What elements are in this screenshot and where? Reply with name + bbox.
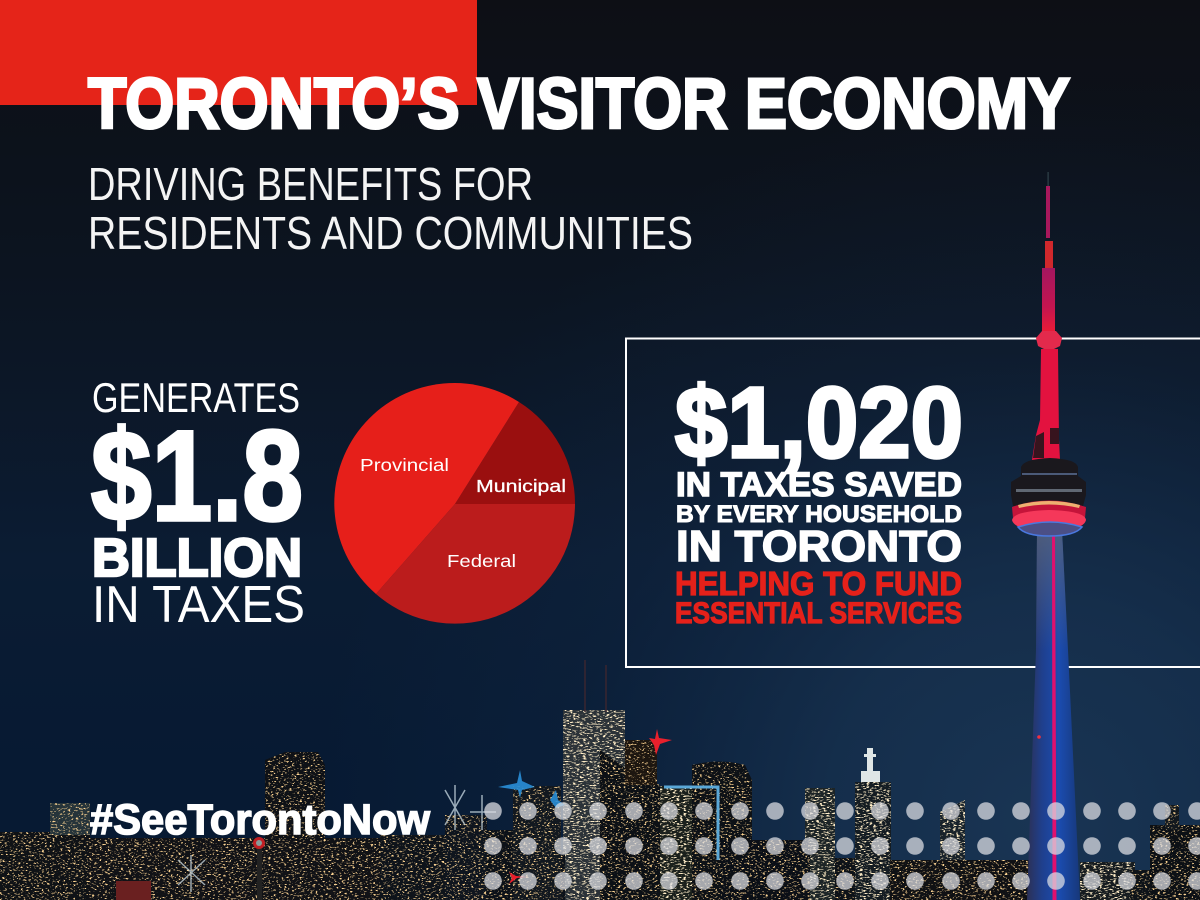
pie label: provincial: Provincial — [360, 455, 449, 475]
pie chart: tax split — [334, 383, 575, 624]
skyline buildings: brightly lit — [563, 710, 1135, 900]
statistic: taxes generated: IN TAXES — [92, 576, 305, 634]
dark red block — [116, 881, 151, 900]
subtitle — [88, 158, 693, 259]
statistic: household savings: $1,020 — [675, 367, 963, 479]
statistic: household savings: BY EVERY HOUSEHOLD — [676, 501, 962, 528]
dark shaft details — [1033, 428, 1059, 458]
statistic: taxes generated — [91, 374, 305, 634]
shaft upper haze — [1036, 530, 1068, 650]
red beacon — [253, 837, 265, 900]
shaft red marker — [1037, 735, 1041, 739]
subtitle: DRIVING BENEFITS FOR — [88, 158, 533, 210]
blue roof light — [664, 787, 718, 860]
callout frame: household savings — [626, 338, 1200, 667]
title: TORONTO’S VISITOR ECONOMY — [88, 65, 1070, 144]
pie slice: provincial — [334, 383, 519, 594]
statistic: household savings: HELPING TO FUND — [675, 565, 962, 602]
pie slice: municipal — [455, 402, 575, 504]
statistic: taxes generated: BILLION — [92, 528, 302, 588]
subtitle: RESIDENTS AND COMMUNITIES — [88, 207, 693, 259]
red star light — [649, 729, 672, 755]
statistic: household savings: IN TAXES SAVED — [676, 466, 962, 504]
statistic: household savings — [675, 367, 963, 630]
tower antenna — [1042, 172, 1055, 334]
pie slice: federal — [376, 504, 575, 624]
red accent block — [0, 0, 477, 105]
tower upper shaft — [1032, 349, 1060, 460]
city skyline — [0, 660, 1200, 900]
statistic: taxes generated: GENERATES — [92, 374, 300, 421]
shaft pink light line — [1052, 530, 1056, 900]
white glints — [178, 785, 496, 892]
blue glints — [498, 770, 565, 808]
CN Tower — [1011, 172, 1086, 900]
dot pattern — [484, 802, 1200, 890]
statistic: taxes generated: $1.8 — [91, 405, 303, 548]
building antennas — [585, 660, 606, 712]
skyline buildings: sparsely lit — [0, 740, 1200, 900]
statistic: household savings: ESSENTIAL SERVICES — [675, 597, 962, 630]
tower lower shaft — [1027, 530, 1080, 900]
statistic: household savings: IN TORONTO — [676, 522, 962, 571]
pie label: municipal: Municipal — [476, 476, 566, 496]
pie label: federal: Federal — [447, 551, 516, 571]
tower sky pod — [1036, 331, 1062, 349]
main pod — [1011, 458, 1086, 536]
rooftop spire — [861, 748, 880, 782]
red star light — [509, 872, 528, 884]
hashtag: #SeeTorontoNow — [90, 796, 431, 844]
